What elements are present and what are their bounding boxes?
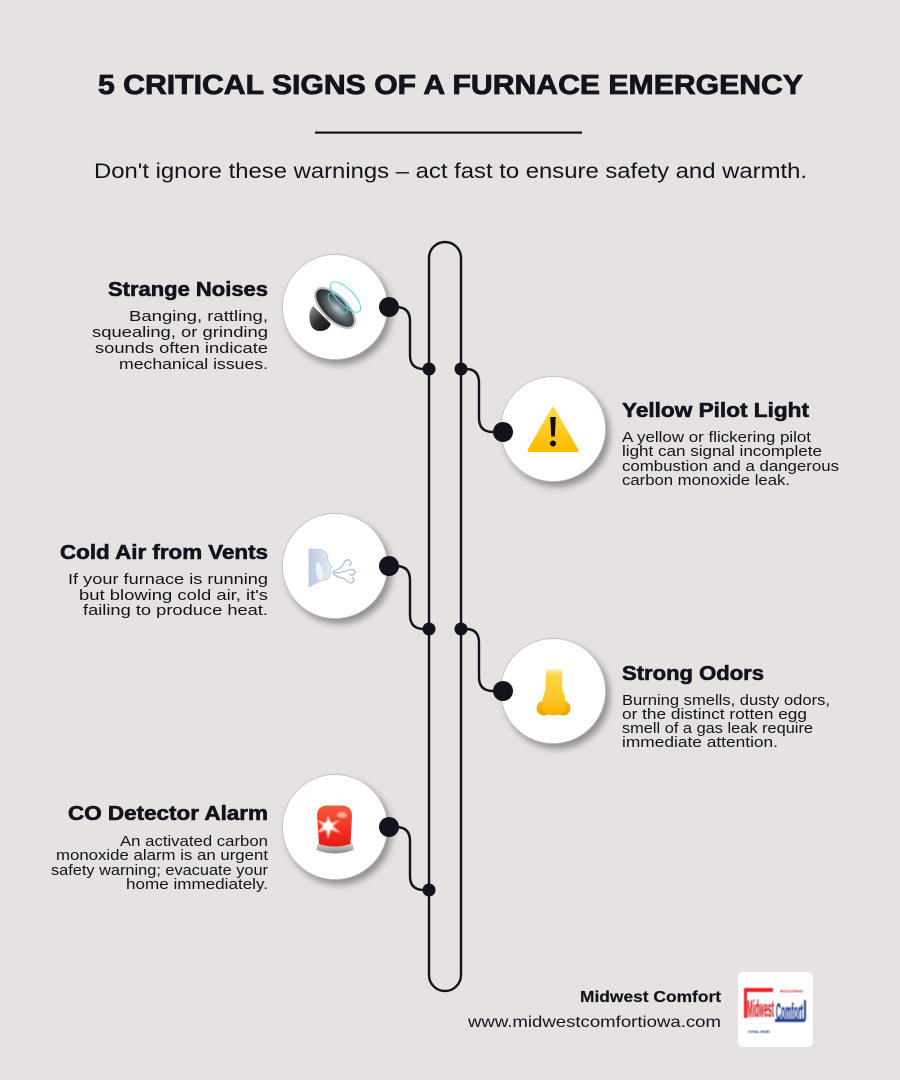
timeline spine xyxy=(389,242,503,991)
text: cold air description: failing to produce heat. xyxy=(83,602,268,619)
text: strange noises description: Banging, rattling, xyxy=(129,308,268,325)
text: strange noises description: squealing, or grinding xyxy=(92,324,268,341)
text: yellow pilot light description: combustion and a dangerous xyxy=(622,458,839,475)
text: strange noises description: mechanical issues. xyxy=(119,356,268,373)
panel: yellow pilot light xyxy=(493,376,839,489)
panel: strong odors xyxy=(493,638,830,751)
panel: strange noises xyxy=(92,254,399,373)
icon: red beacon xyxy=(316,806,354,854)
logo: ONLINE xyxy=(748,1029,770,1034)
icon: speaker xyxy=(308,277,365,335)
panel: cold air from vents xyxy=(60,514,399,619)
text: co detector description: monoxide alarm is an urgent xyxy=(56,847,269,864)
text: co detector description: home immediately. xyxy=(126,876,268,893)
panel: co detector alarm xyxy=(51,774,399,893)
heading: strange noises: Strange Noises xyxy=(108,279,268,301)
footer brand xyxy=(467,989,722,1031)
text: cold air description xyxy=(68,571,268,619)
logo: ROUTING xyxy=(780,988,803,994)
text: strange noises description: sounds often indicate xyxy=(95,340,268,357)
text: cold air description: but blowing cold air, it's xyxy=(79,587,268,604)
logo: Midwest xyxy=(747,996,774,1023)
text: yellow pilot light description: carbon monoxide leak. xyxy=(622,472,790,489)
text: yellow pilot light description: light can signal incomplete xyxy=(622,443,822,460)
text: strong odors description: immediate attention. xyxy=(622,734,778,751)
text: co detector description xyxy=(51,833,269,893)
text: strange noises description xyxy=(92,308,268,373)
subtitle: Don't ignore these warnings – act fast to ensure safety and warmth. xyxy=(94,160,807,183)
text: strong odors description: or the distinct rotten egg xyxy=(622,706,807,723)
text: co detector description: An activated carbon xyxy=(120,833,268,850)
brand name: Midwest Comfort xyxy=(580,989,722,1006)
title: 5 CRITICAL SIGNS OF A FURNACE EMERGENCY xyxy=(98,69,803,100)
text: yellow pilot light description xyxy=(622,429,839,489)
text: yellow pilot light description: A yellow or flickering pilot xyxy=(622,429,812,446)
text: strong odors description xyxy=(622,692,830,751)
heading: co detector alarm: CO Detector Alarm xyxy=(68,803,268,825)
heading: yellow pilot light: Yellow Pilot Light xyxy=(622,400,809,422)
icon: warning triangle xyxy=(529,408,577,450)
text: Comfort xyxy=(776,999,803,1026)
text: cold air description: If your furnace is running xyxy=(68,571,268,588)
heading: strong odors: Strong Odors xyxy=(622,663,764,685)
heading: cold air from vents: Cold Air from Vents xyxy=(60,542,268,564)
text: strong odors description: smell of a gas leak require xyxy=(622,720,813,737)
icon: blowing face xyxy=(309,549,355,587)
text: strong odors description: Burning smells, dusty odors, xyxy=(622,692,830,709)
website: www.midwestcomfortiowa.com xyxy=(467,1014,721,1031)
icon: nose xyxy=(536,669,570,716)
logo xyxy=(738,972,813,1047)
text: co detector description: safety warning; evacuate your xyxy=(51,862,268,879)
